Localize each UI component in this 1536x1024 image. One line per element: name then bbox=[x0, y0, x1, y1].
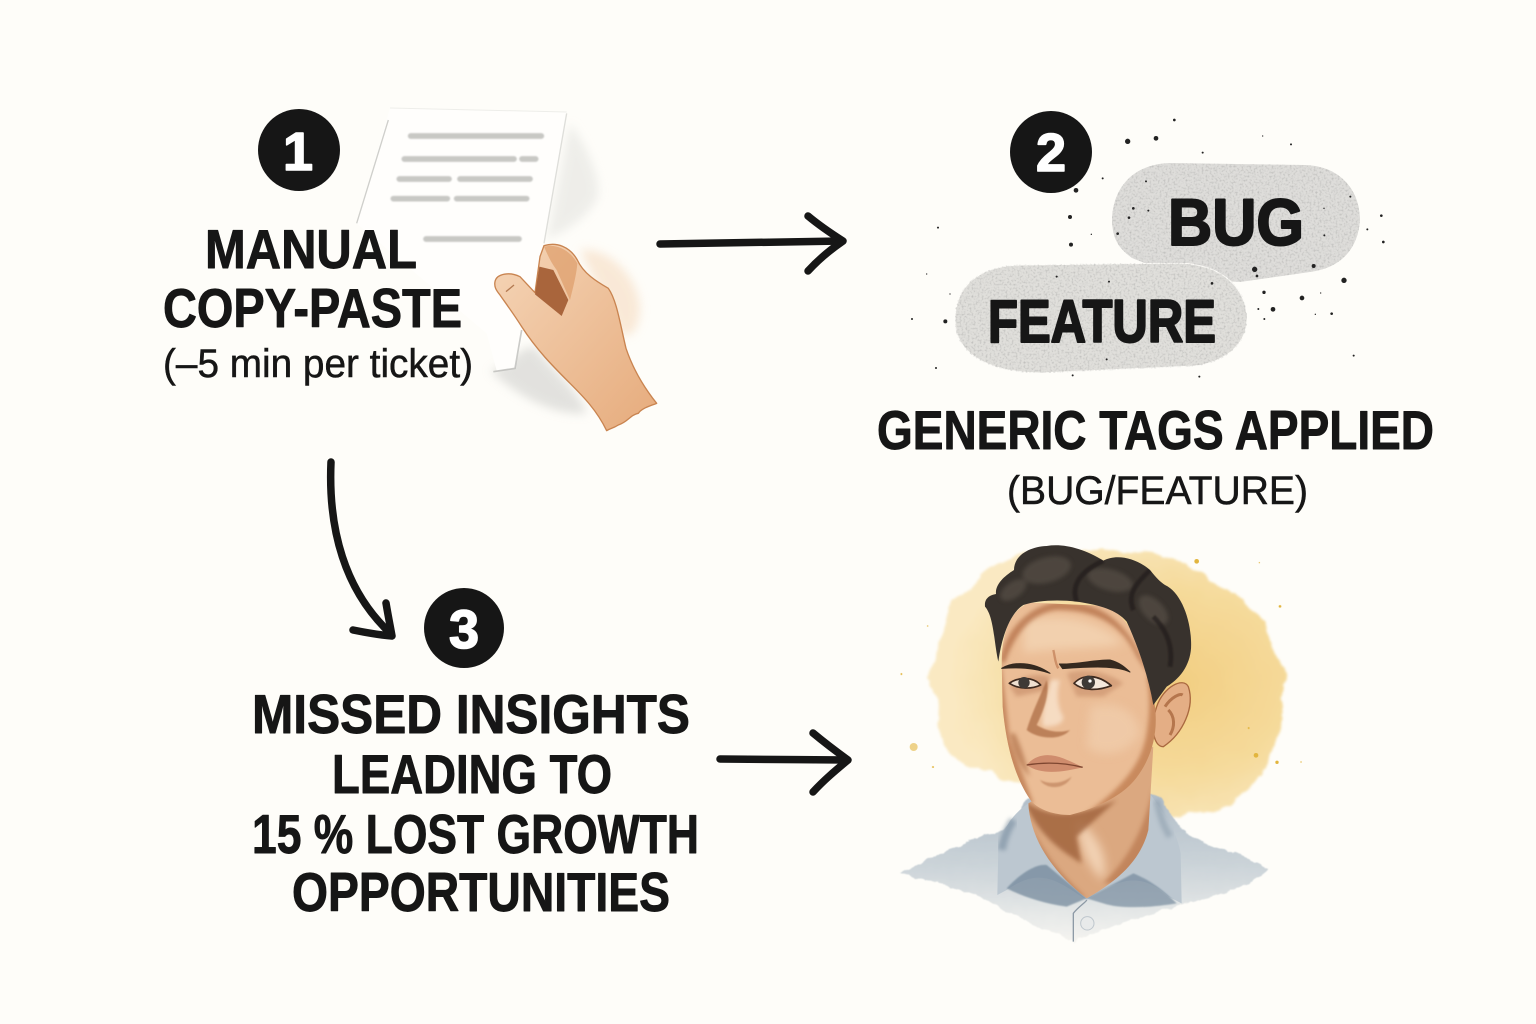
arrow: step 1 to step 2 bbox=[660, 216, 843, 271]
tag: feature bbox=[955, 263, 1247, 373]
heading: missed insights: MISSED INSIGHTS bbox=[252, 683, 690, 745]
icon: paper held by hand bbox=[357, 108, 657, 431]
illustration: frustrated person bbox=[900, 540, 1302, 942]
panel: step 2 generic tags bbox=[877, 111, 1434, 513]
step number 2 bbox=[1010, 111, 1092, 193]
neck bbox=[1028, 746, 1154, 898]
arrow: step 1 down to step 3 bbox=[331, 462, 392, 636]
heading: manual: MANUAL bbox=[205, 218, 417, 280]
shirt bbox=[900, 793, 1268, 942]
mouth bbox=[1027, 755, 1083, 772]
eyebrows bbox=[1002, 664, 1050, 673]
step number 2: 2 bbox=[1036, 123, 1066, 183]
step number 1 bbox=[258, 109, 340, 191]
step number 3 bbox=[424, 588, 504, 668]
watercolor yellow wash bbox=[928, 550, 1283, 816]
face bbox=[1001, 602, 1156, 815]
hair bbox=[980, 540, 1197, 710]
heading: opportunities: OPPORTUNITIES bbox=[292, 861, 670, 923]
tag: bug: BUG bbox=[1168, 185, 1304, 259]
panel: step 1 manual copy-paste bbox=[163, 108, 657, 431]
ear bbox=[1153, 683, 1190, 747]
step number 3: 3 bbox=[449, 600, 479, 660]
caption: bug/feature: (BUG/FEATURE) bbox=[1007, 469, 1308, 513]
panel: step 3 missed insights bbox=[252, 588, 699, 923]
ink speckles bbox=[911, 119, 1385, 378]
heading: leading to: LEADING TO bbox=[332, 743, 612, 805]
arrow: step 3 to frustrated person bbox=[720, 733, 848, 792]
caption: time per ticket: (–5 min per ticket) bbox=[163, 342, 473, 386]
heading: copy-paste: COPY-PASTE bbox=[163, 277, 462, 339]
heading: generic tags applied: GENERIC TAGS APPLIED bbox=[877, 399, 1434, 461]
heading: 15 % lost growth: 15 % LOST GROWTH bbox=[252, 803, 699, 865]
step number 1: 1 bbox=[283, 122, 313, 182]
eyes bbox=[1009, 679, 1041, 688]
paint specks bbox=[900, 559, 1302, 768]
tag: feature: FEATURE bbox=[988, 288, 1216, 355]
tag: bug bbox=[1112, 163, 1360, 282]
